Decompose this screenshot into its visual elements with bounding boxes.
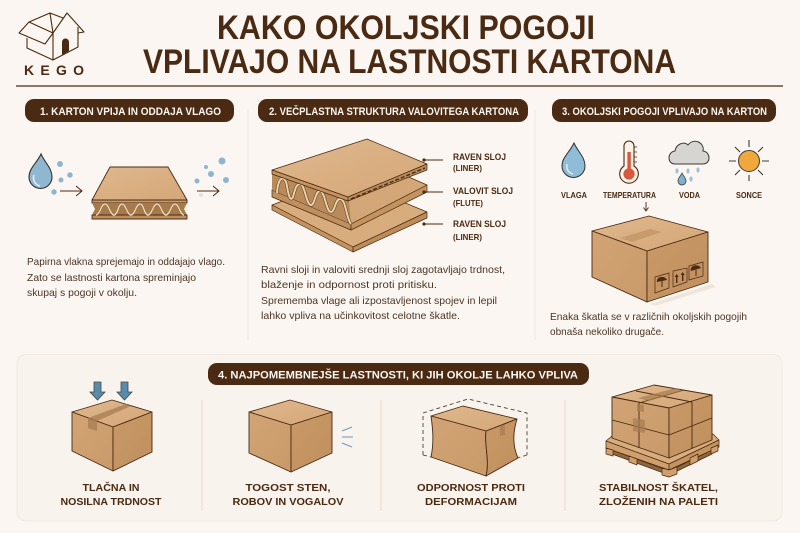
icon: humidity drop — [562, 143, 585, 178]
labels: conditions: TEMPERATURA — [603, 190, 656, 200]
icon: cloud with rain — [669, 141, 709, 185]
icon: dashed outline — [423, 399, 527, 458]
text block 1: Zato se lastnosti kartona spreminjajo — [27, 272, 196, 284]
icon: corrugated board — [92, 167, 187, 219]
icon: cardboard box with symbols — [592, 216, 716, 306]
labels: layers: VALOVIT SLOJ — [453, 186, 513, 196]
label: ROBOV IN VOGALOV — [232, 496, 344, 508]
label: NOSILNA TRDNOST — [60, 496, 162, 508]
logo: KEGO: KEGO — [24, 62, 84, 78]
icon: stacked boxes — [612, 385, 712, 458]
item: rigidity — [232, 400, 353, 508]
text block 3: obnaša nekoliko drugače. — [550, 326, 664, 338]
text block 2: blaženje in odpornost proti pritisku. — [261, 279, 437, 291]
label: TOGOST STEN, — [246, 482, 331, 494]
arrow: moisture in — [60, 186, 82, 196]
heading pill 4: 4. NAJPOMEMBNEJŠE LASTNOSTI, KI JIH OKOLJE LAHKO VPLIVA — [218, 368, 578, 382]
text block 1 — [27, 256, 225, 299]
icon: sun — [729, 140, 769, 181]
labels: layers: RAVEN SLOJ — [453, 152, 506, 162]
logo: KEGO — [19, 13, 84, 78]
labels: layers — [422, 152, 513, 242]
heading pill 1: 1. KARTON VPIJA IN ODDAJA VLAGO — [40, 106, 221, 118]
text block 2: lahko vpliva na učinkovitost celotne škatle. — [261, 310, 460, 322]
icon: pallet — [606, 434, 719, 477]
text block 2 — [261, 264, 505, 322]
icon: thermometer — [620, 141, 638, 183]
item: compressive strength — [60, 382, 162, 508]
labels: layers: RAVEN SLOJ — [453, 219, 506, 229]
labels: conditions: VODA — [679, 190, 700, 200]
panel: 1 moisture — [25, 99, 234, 299]
labels: layers: (LINER) — [453, 232, 482, 242]
heading pill 3 — [552, 99, 776, 122]
label: ODPORNOST PROTI — [417, 482, 525, 494]
label: STABILNOST ŠKATEL, — [599, 481, 718, 494]
panel: 3 conditions — [550, 99, 776, 338]
label: TLAČNA IN — [82, 481, 140, 494]
icon: box with tape — [72, 400, 152, 471]
heading pill 2 — [258, 99, 528, 122]
panel: 2 structure — [258, 99, 528, 322]
labels: layers: (FLUTE) — [453, 198, 483, 208]
icon: released moisture particles — [194, 158, 229, 197]
label: DEFORMACIJAM — [425, 496, 517, 508]
labels: conditions — [561, 190, 762, 200]
text block 3 — [550, 311, 747, 338]
title: VPLIVAJO NA LASTNOSTI KARTONA — [143, 43, 676, 81]
labels: layers: (LINER) — [453, 163, 482, 173]
diagram: corrugated layers — [272, 139, 427, 252]
item: pallet stability — [599, 385, 719, 508]
label: ZLOŽENIH NA PALETI — [599, 495, 718, 508]
text block 3: Enaka škatla se v različnih okoljskih pogojih — [550, 311, 747, 323]
label — [60, 481, 162, 508]
arrow: to box — [644, 202, 648, 211]
title: KAKO OKOLJSKI POGOJI — [217, 9, 595, 47]
heading pill 1 — [25, 99, 234, 122]
labels: conditions: SONCE — [736, 190, 762, 200]
label — [232, 482, 344, 508]
label — [599, 481, 718, 508]
text block 2: Sprememba vlage ali izpostavljenost spojev in lepil — [261, 295, 497, 307]
panel: 4 key properties — [17, 354, 782, 521]
icon: plain box — [249, 400, 332, 472]
heading pill 4 — [208, 363, 589, 385]
label — [417, 482, 525, 508]
icon: stress marks — [342, 427, 353, 447]
icon: water drop with particles — [29, 154, 73, 195]
icon: pressure arrows — [90, 382, 132, 400]
labels: conditions: VLAGA — [561, 190, 587, 200]
text block 2: Ravni sloji in valoviti srednji sloj zagotavljajo trdnost, — [261, 264, 505, 276]
heading pill 2: 2. VEČPLASTNA STRUKTURA VALOVITEGA KARTONA — [269, 105, 519, 118]
title — [143, 9, 676, 81]
text block 1: Papirna vlakna sprejemajo in oddajajo vlago. — [27, 256, 225, 268]
item: deformation — [417, 399, 527, 508]
arrow: moisture out — [197, 186, 219, 196]
text block 1: skupaj s pogoji v okolju. — [27, 287, 137, 299]
icon: deformed box — [431, 406, 518, 476]
heading pill 3: 3. OKOLJSKI POGOJI VPLIVAJO NA KARTON — [562, 106, 767, 118]
